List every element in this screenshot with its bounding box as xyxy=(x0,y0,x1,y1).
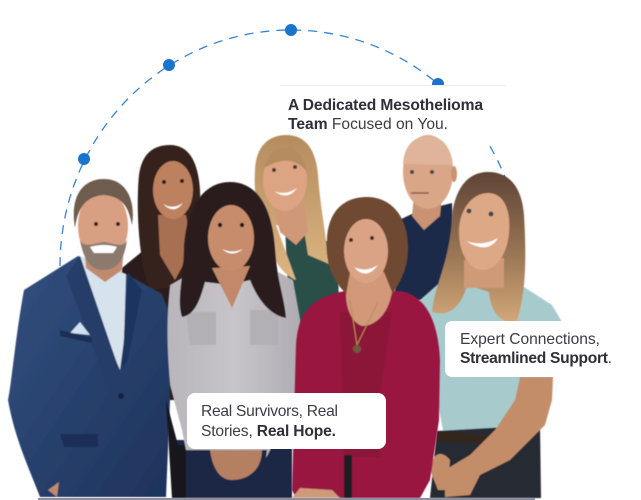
person: centre woman in grey blouse xyxy=(166,182,302,498)
callout: survivors xyxy=(187,393,386,449)
person: back left woman xyxy=(122,145,205,400)
person: right woman xyxy=(420,172,562,498)
person: centre woman in crimson cardigan xyxy=(292,197,440,498)
callout: connections xyxy=(445,321,641,377)
person: bald man xyxy=(395,135,457,300)
person: back centre blonde woman xyxy=(255,135,340,335)
callout: dedicated team: A Dedicated Mesothelioma xyxy=(288,97,483,114)
callout: connections: Streamlined Support. xyxy=(460,350,612,367)
bottom edge line xyxy=(38,498,535,500)
callout: dedicated team: Team Focused on You. xyxy=(288,116,448,133)
callout: connections: Expert Connections, xyxy=(460,331,600,348)
callout: survivors: Stories, Real Hope. xyxy=(201,423,336,440)
callout: dedicated team xyxy=(274,85,506,170)
person: left man in navy suit xyxy=(8,179,170,497)
dashed arc with dots xyxy=(60,24,522,266)
callout: survivors: Real Survivors, Real xyxy=(201,403,338,420)
